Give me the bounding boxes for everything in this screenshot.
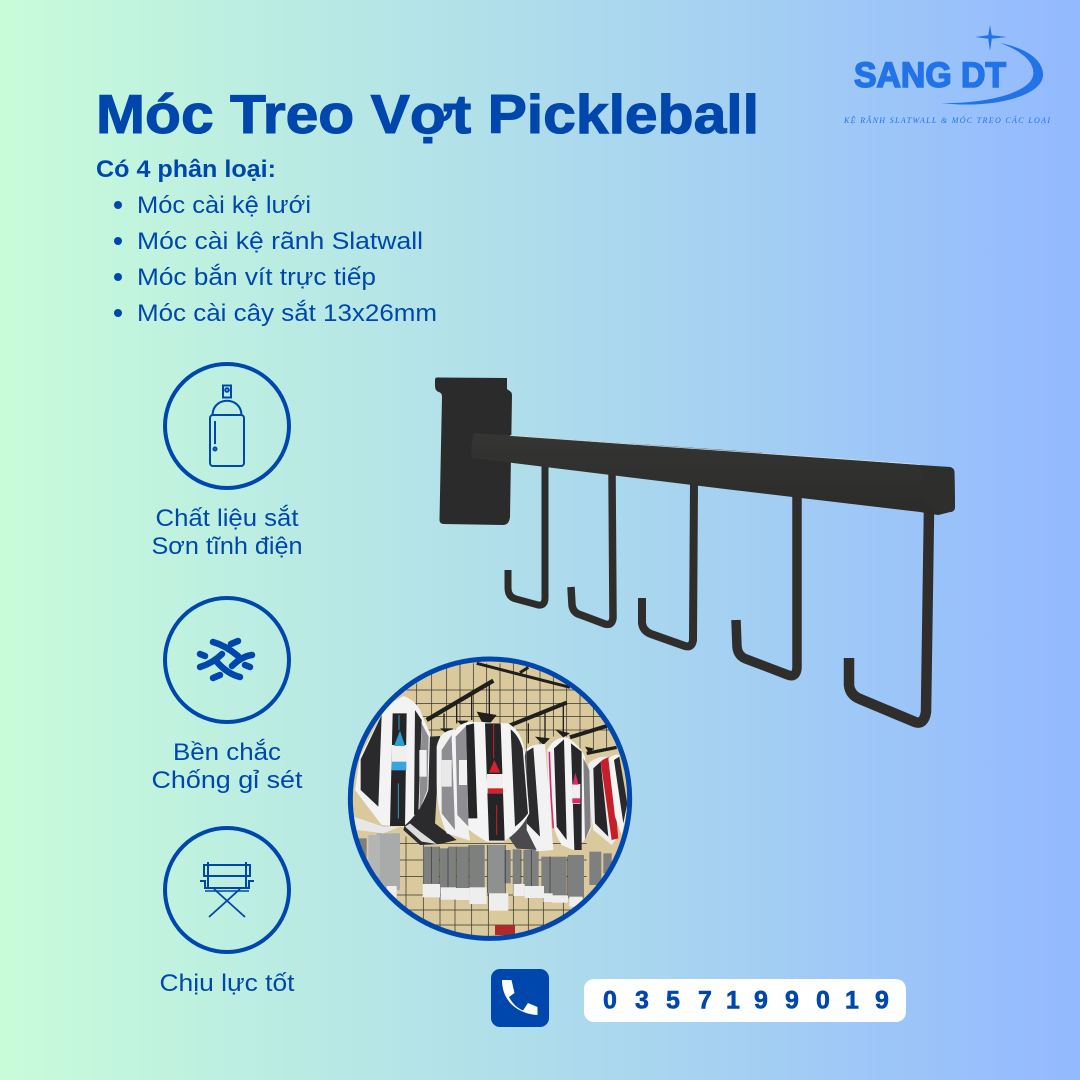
icon: spray can xyxy=(165,364,289,488)
text block: product types xyxy=(96,156,437,327)
logo swoosh xyxy=(941,43,1043,105)
logo tagline: KỆ RÃNH SLATWALL & MÓC TREO CÁC LOẠI xyxy=(843,115,1050,125)
label: Chịu lực tốt xyxy=(160,970,295,997)
logo: Sang DT xyxy=(843,25,1050,125)
hook 3 xyxy=(642,482,694,646)
hanger bars xyxy=(427,663,617,755)
feature: powder coated steel xyxy=(152,364,302,560)
hook 5 xyxy=(849,510,929,723)
paddle: pink xyxy=(547,737,592,850)
label: Bền chắc xyxy=(173,739,281,766)
product photo: slatwall hook xyxy=(435,378,955,723)
icon: folding chair xyxy=(165,828,289,952)
phone number pill xyxy=(584,979,906,1022)
logo star xyxy=(975,25,1007,51)
list item 4: Móc cài cây sắt 13x26mm xyxy=(137,300,437,327)
icon: woven strands xyxy=(165,598,289,722)
label: Chống gỉ sét xyxy=(152,767,303,794)
phone icon xyxy=(491,969,549,1027)
label: Sơn tĩnh điện xyxy=(152,533,302,560)
list item 2: Móc cài kệ rãnh Slatwall xyxy=(137,228,423,255)
photo: pickleball paddles on grid wall xyxy=(340,650,640,950)
wire grid xyxy=(397,663,613,937)
hook 2 xyxy=(571,472,613,624)
title: Móc Treo Vợt Pickleball xyxy=(96,83,759,145)
hook 1 xyxy=(508,466,545,605)
label: Chất liệu sắt xyxy=(156,505,299,532)
list item 1: Móc cài kệ lưới xyxy=(137,192,311,219)
paddle handles xyxy=(353,817,612,911)
list item 3: Móc bắn vít trực tiếp xyxy=(137,264,376,291)
mesh bottom tag xyxy=(495,925,515,935)
feature: strong load bearing xyxy=(160,828,295,997)
arm xyxy=(471,433,955,515)
logo wordmark: SANG DT xyxy=(854,56,1006,95)
back paddles xyxy=(403,729,627,851)
subheading: Có 4 phân loại: xyxy=(96,156,276,183)
photo ring xyxy=(350,659,630,938)
slat plate xyxy=(435,378,512,525)
arm highlight xyxy=(510,436,920,464)
arm end cap xyxy=(921,466,955,515)
paddle: blue xyxy=(355,696,430,827)
feature: durable rust resistant xyxy=(152,598,303,794)
hook 4 xyxy=(736,494,797,676)
paddle: red xyxy=(452,722,529,842)
phone number: 0357199019 xyxy=(603,986,889,1014)
